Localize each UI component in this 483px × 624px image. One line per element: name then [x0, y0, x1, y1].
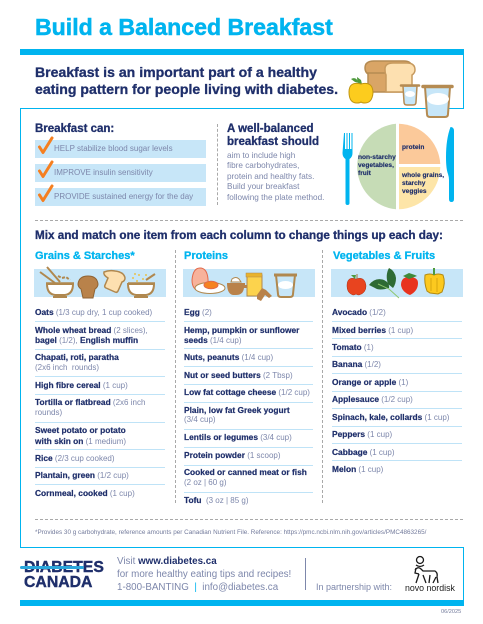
icon strip: grains: [34, 266, 166, 298]
logo: novo nordisk: [403, 554, 455, 594]
logo: Diabetes Canada: [20, 559, 105, 591]
Applesauce: Applesauce (1/2 cup): [332, 394, 413, 404]
High fibre cereal: High fibre cereal (1 cup): [35, 380, 128, 390]
plate label: vegetables: [358, 154, 396, 177]
benefit: provide: PROVIDE sustained energy for the day: [54, 192, 193, 201]
plate sections: [357, 124, 440, 209]
plate method description: following the plate method.: [227, 193, 324, 202]
dashed separator: [35, 220, 463, 221]
intro statement: Breakfast is an important part of a healthy: [35, 64, 317, 80]
Tortilla size: rounds): [35, 408, 62, 417]
Cabbage: Cabbage (1 cup): [332, 447, 394, 457]
plate method description: [227, 151, 324, 202]
plate label: grains: whole grains,: [402, 172, 444, 179]
Spinach: Spinach, kale, collards (1 cup): [332, 412, 449, 422]
heading: well-balanced breakfast: [227, 122, 319, 148]
Greek yogurt: Plain, low fat Greek yogurt: [184, 405, 290, 415]
grains list: [34, 307, 165, 498]
partnership label: In partnership with:: [316, 582, 392, 592]
heading: Breakfast can: Breakfast can:: [35, 123, 114, 135]
icon strip: vegetables and fruits: [331, 268, 463, 298]
contact text: 1-800-BANTING | info@diabetes.ca: [117, 582, 278, 593]
column divider: [175, 250, 176, 503]
Avocado: Avocado (1/2): [332, 307, 386, 317]
Tomato: Tomato (1): [332, 342, 374, 352]
benefit: help: HELP stabilize blood sugar levels: [54, 144, 173, 153]
Sweet potato: Sweet potato or potato: [35, 425, 126, 435]
proteins list: [184, 307, 313, 505]
footer frame: [20, 547, 464, 606]
meat amount: (2 oz | 60 g): [184, 478, 227, 487]
Protein powder: Protein powder (1 scoop): [184, 450, 281, 460]
Whole wheat bread: Whole wheat bread (2 slices),: [35, 325, 148, 335]
Cooked meat: Cooked or canned meat or fish: [184, 467, 307, 477]
heading: well-balanced breakfast: breakfast should: [227, 136, 319, 148]
Chapati size: (2x6 inch rounds): [35, 363, 99, 372]
Nuts: Nuts, peanuts (1/4 cup): [184, 352, 273, 362]
plate label: grains: [402, 172, 444, 195]
plate label: vegetables: fruit: [358, 170, 371, 177]
icon: orange check marks: [38, 136, 54, 202]
seeds: seeds (1/4 cup): [184, 335, 242, 345]
Tortilla: Tortilla or flatbread (2x6 inch: [35, 397, 145, 407]
plate method description: fibre carbohydrates,: [227, 161, 299, 170]
column heading: grains: Grains & Starches*: [35, 250, 135, 262]
yogurt amount: (3/4 cup): [184, 415, 216, 424]
bagel: bagel (1/2), English muffin: [35, 335, 138, 345]
wordmark: novo nordisk: [405, 583, 455, 593]
plate label: vegetables: non-starchy: [358, 154, 396, 161]
Peppers: Peppers (1 cup): [332, 429, 392, 439]
icon: fork: [342, 133, 352, 205]
plate method description: aim to include high: [227, 151, 295, 160]
footer divider: [305, 558, 306, 590]
Oats: Oats (1/3 cup dry, 1 cup cooked): [35, 307, 152, 317]
icon: knife: [446, 127, 454, 202]
Orange: Orange or apple (1): [332, 377, 408, 387]
Nut butters: Nut or seed butters (2 Tbsp): [184, 370, 293, 380]
Egg: Egg (2): [184, 307, 212, 317]
title: Build a Balanced Breakfast: [35, 14, 333, 40]
benefit: improve: [35, 164, 206, 182]
icon strip: proteins: [183, 268, 315, 301]
section heading: Mix and match one item from each column to change things up each day:: [35, 229, 443, 242]
Melon: Melon (1 cup): [332, 464, 383, 474]
chart: plate method: [342, 124, 454, 210]
vegetables and fruits list: [332, 307, 462, 474]
column divider: [322, 250, 323, 503]
column heading: proteins: Proteins: [184, 250, 228, 262]
footnote: *Provides 30 g carbohydrate, reference amounts per Canadian Nutrient File. Reference: https://pmc.ncbi.nlm.nih.gov/articles/PMC4863265/: [35, 529, 426, 536]
plate label: protein: protein: [402, 144, 424, 151]
contact text: for more healthy eating tips and recipes!: [117, 569, 291, 580]
contact text: Visit www.diabetes.ca: [117, 556, 217, 567]
benefit: provide: [35, 188, 206, 206]
contact text: [117, 555, 297, 595]
header frame: [20, 49, 464, 109]
column heading: vegetables: Vegetables & Fruits: [333, 250, 435, 262]
plate method description: Build your breakfast: [227, 182, 299, 191]
Cottage cheese: Low fat cottage cheese (1/2 cup): [184, 387, 310, 397]
icon: apple, bread and yogurt: [348, 60, 454, 118]
Rice: Rice (2/3 cup cooked): [35, 453, 115, 463]
heading: well-balanced breakfast: A well-balanced: [227, 123, 314, 135]
Banana: Banana (1/2): [332, 359, 381, 369]
logo: Diabetes Canada: DIABETES: [24, 559, 104, 576]
plate label: grains: starchy: [402, 180, 425, 187]
plate label: grains: veggies: [402, 188, 427, 195]
benefit: help: [35, 140, 206, 158]
intro statement: [35, 64, 338, 98]
Cornmeal: Cornmeal, cooked (1 cup): [35, 488, 135, 498]
icon: apis bull: [415, 556, 438, 583]
Chapati: Chapati, roti, paratha: [35, 352, 119, 362]
skin on: with skin on (1 medium): [35, 436, 126, 446]
Tofu: Tofu (3 oz | 85 g): [184, 495, 249, 505]
benefit: improve: IMPROVE insulin sensitivity: [54, 168, 153, 177]
Lentils: Lentils or legumes (3/4 cup): [184, 432, 292, 442]
Mixed berries: Mixed berries (1 cup): [332, 325, 413, 335]
date code: 06/2025: [441, 609, 461, 615]
plate label: vegetables: vegetables,: [358, 162, 394, 169]
divider: [217, 124, 218, 205]
main panel frame: [20, 109, 463, 548]
intro statement: eating pattern for people living with diabetes.: [35, 80, 338, 96]
dashed separator: [35, 519, 463, 520]
plate method description: protein and healthy fats.: [227, 172, 314, 181]
logo: Diabetes Canada: CANADA: [24, 574, 92, 591]
Hemp: Hemp, pumpkin or sunflower: [184, 325, 299, 335]
Plantain: Plantain, green (1/2 cup): [35, 470, 129, 480]
